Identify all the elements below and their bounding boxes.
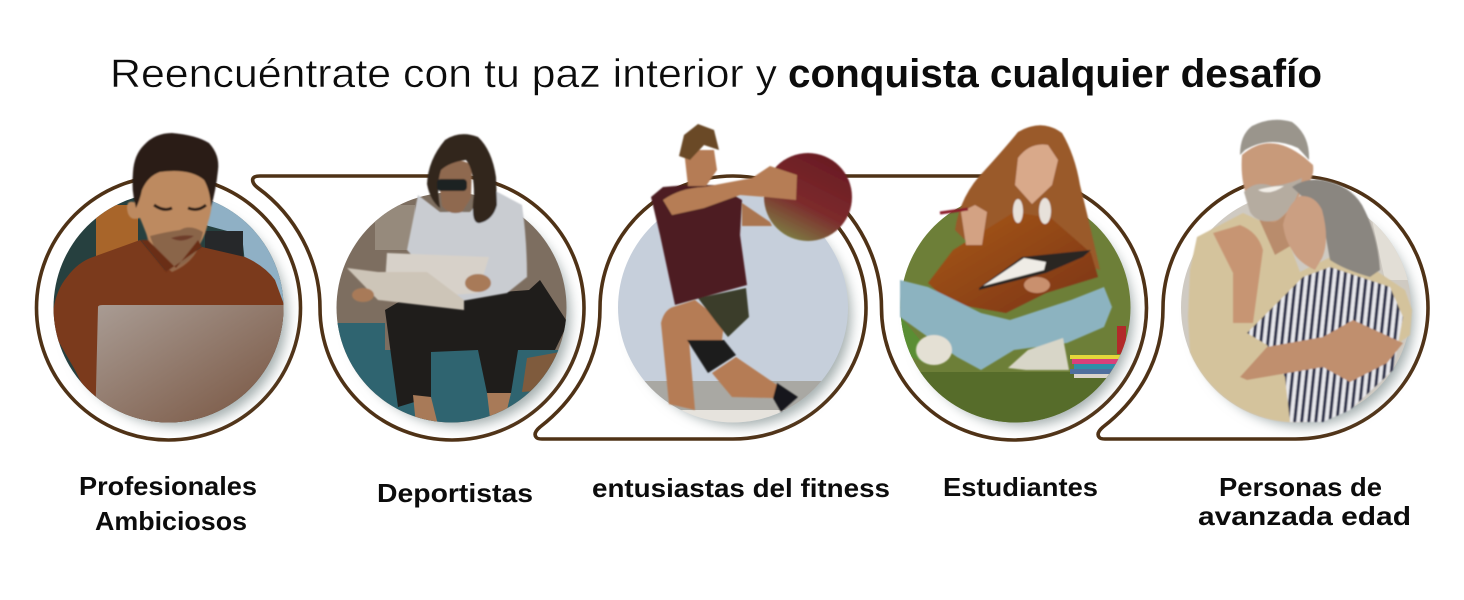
panel: student photo — [895, 125, 1135, 432]
title: conquista cualquier desafío — [788, 52, 1322, 96]
label: Personas de avanzada edad — [1198, 472, 1411, 531]
title: Reencuéntrate con tu paz interior y — [110, 52, 777, 96]
label: Profesionales Ambiciosos: Ambiciosos — [95, 506, 247, 536]
connected outline rings — [36, 176, 1428, 440]
panel: seniors photo — [1175, 120, 1420, 430]
person: man lunging with medicine ball — [651, 124, 852, 412]
label: Profesionales Ambiciosos — [79, 471, 257, 536]
panel: professional photo — [50, 133, 290, 430]
label: Profesionales Ambiciosos: Profesionales — [79, 471, 257, 501]
label: Deportistas: Deportistas — [377, 478, 533, 508]
person: woman reading documents — [347, 134, 527, 310]
label: entusiastas del fitness: entusiastas del fitness — [592, 473, 890, 503]
person: embracing older couple — [1188, 120, 1412, 422]
person: student reading on the floor — [900, 125, 1112, 370]
title — [110, 52, 1322, 96]
label: Estudiantes: Estudiantes — [943, 472, 1098, 502]
panel: athlete photo — [330, 134, 570, 430]
person: man with laptop — [127, 133, 218, 272]
label: Personas de avanzada edad: avanzada edad — [1198, 501, 1411, 531]
label: Personas de avanzada edad: Personas de — [1219, 472, 1382, 502]
panel: fitness photo — [610, 124, 855, 430]
